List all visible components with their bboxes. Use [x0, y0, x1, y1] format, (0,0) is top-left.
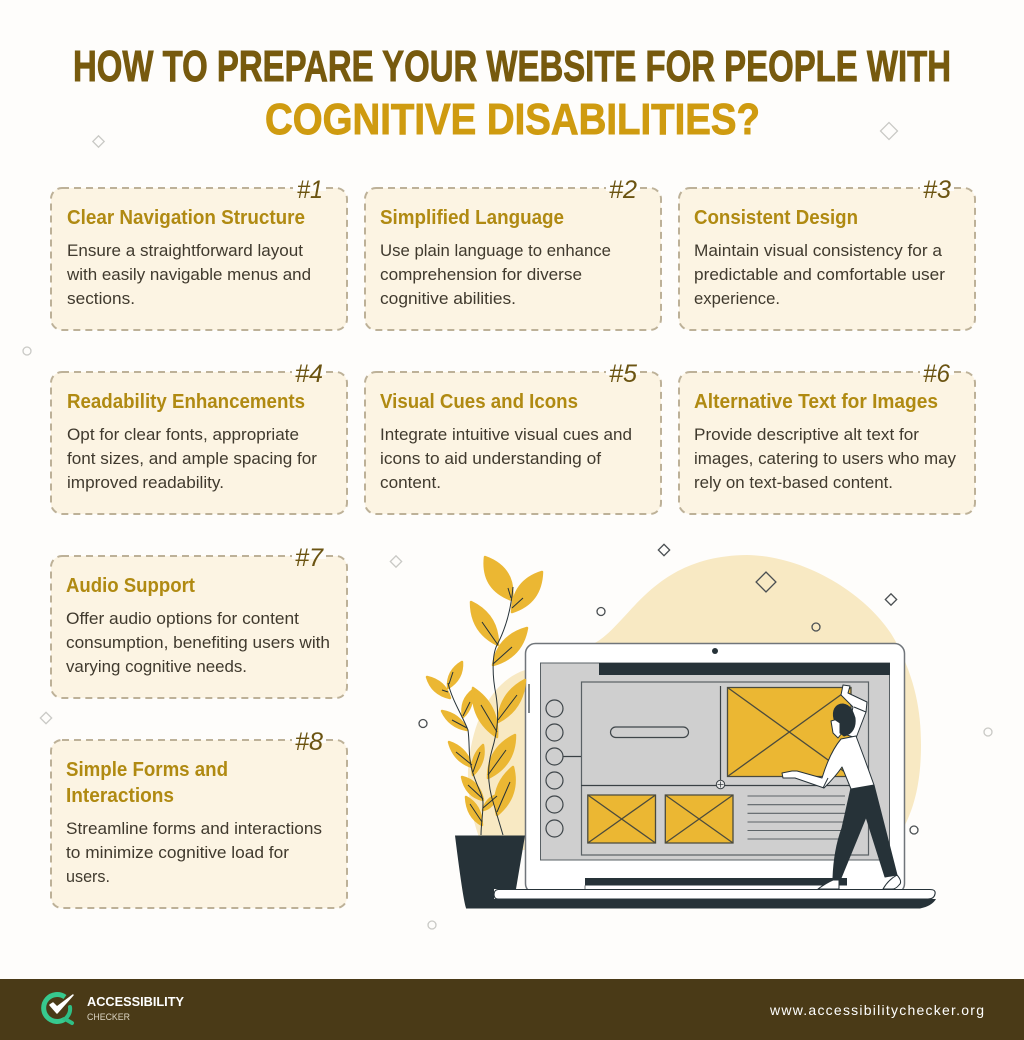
person: [782, 685, 901, 889]
text: tip 7: varying cognitive needs.: [66, 658, 247, 676]
decorative shapes: [23, 123, 992, 929]
text: tip 7: [66, 610, 330, 676]
text: tip 1: [66, 242, 311, 308]
panel: tip 2: #2: [609, 176, 637, 204]
heading: tip 8: [66, 759, 228, 807]
text: tip 6: [694, 426, 957, 492]
panel: tip 5: #5: [609, 360, 637, 388]
website url: www.accessibilitychecker.org: [769, 1002, 984, 1018]
plant: [427, 557, 542, 835]
panel: tip 6: #6: [923, 360, 950, 388]
text: tip 7: consumption, benefiting users with: [66, 634, 330, 652]
text: tip 2: cognitive abilities.: [380, 290, 516, 308]
laptop: [466, 644, 936, 908]
text: tip 1: with easily navigable menus and: [66, 266, 311, 284]
background blob: [468, 555, 921, 868]
text: tip 8: users.: [66, 868, 110, 886]
panel: tip 5: [365, 360, 661, 514]
heading: tip 8: Interactions: [66, 785, 174, 807]
logo text: [87, 995, 185, 1023]
text: tip 8: [66, 820, 322, 886]
text: tip 3: predictable and comfortable user: [694, 266, 946, 284]
text: tip 4: Opt for clear fonts, appropriate: [67, 426, 299, 444]
floating markers: [419, 544, 918, 834]
panel: tip 4: [51, 360, 347, 514]
text: tip 6: Provide descriptive alt text for: [694, 426, 920, 444]
image placeholders: [588, 688, 851, 843]
text: tip 7: Offer audio options for content: [66, 610, 299, 628]
text: tip 6: rely on text-based content.: [694, 474, 893, 492]
panel: tip 1: [51, 176, 347, 330]
logo icon: [44, 995, 73, 1023]
text: tip 5: Integrate intuitive visual cues and: [380, 426, 632, 444]
panel: tip 4: #4: [295, 360, 323, 388]
title: [73, 42, 951, 144]
illustration: laptop, plant and person: [419, 544, 936, 908]
text: tip 6: images, catering to users who may: [694, 450, 957, 468]
text: tip 1: Ensure a straightforward layout: [67, 242, 303, 260]
text: tip 2: comprehension for diverse: [380, 266, 582, 284]
panel: tip 7: #7: [295, 544, 324, 572]
panel: tip 3: #3: [923, 176, 951, 204]
panel: tip 2: [365, 176, 661, 330]
text: tip 1: sections.: [67, 290, 135, 308]
panel: tip 6: [679, 360, 975, 514]
plant pot: [455, 836, 525, 908]
text: tip 2: [380, 242, 611, 308]
text: tip 4: improved readability.: [67, 474, 224, 492]
text: tip 5: content.: [380, 474, 441, 492]
panel: tip 8: #8: [295, 728, 323, 756]
text: tip 3: Maintain visual consistency for a: [694, 242, 943, 260]
text: tip 3: experience.: [694, 290, 780, 308]
logo text: CHECKER: [87, 1012, 130, 1023]
panel: tip 3: [679, 176, 975, 330]
text: tip 8: Streamline forms and interactions: [66, 820, 322, 838]
footer bar: [0, 979, 1024, 1040]
text: tip 3: [694, 242, 946, 308]
logo text: ACCESSIBILITY: [87, 995, 185, 1009]
panel: tip 8: [51, 728, 347, 908]
panel: tip 7: [51, 544, 347, 698]
heading: tip 6: Alternative Text for Images: [694, 391, 938, 413]
text: tip 5: icons to aid understanding of: [380, 450, 601, 468]
heading: tip 7: Audio Support: [66, 575, 195, 597]
text: tip 4: font sizes, and ample spacing for: [67, 450, 318, 468]
title: COGNITIVE DISABILITIES?: [265, 95, 760, 144]
heading: tip 8: Simple Forms and: [66, 759, 228, 781]
text: tip 2: Use plain language to enhance: [380, 242, 611, 260]
heading: tip 3: Consistent Design: [694, 207, 858, 229]
text: tip 5: [380, 426, 632, 492]
heading: tip 2: Simplified Language: [380, 207, 564, 229]
panel: tip 1: #1: [297, 176, 323, 204]
text: tip 4: [67, 426, 318, 492]
text: tip 8: to minimize cognitive load for: [66, 844, 290, 862]
heading: tip 1: Clear Navigation Structure: [67, 207, 305, 229]
heading: tip 5: Visual Cues and Icons: [380, 391, 578, 413]
heading: tip 4: Readability Enhancements: [67, 391, 305, 413]
